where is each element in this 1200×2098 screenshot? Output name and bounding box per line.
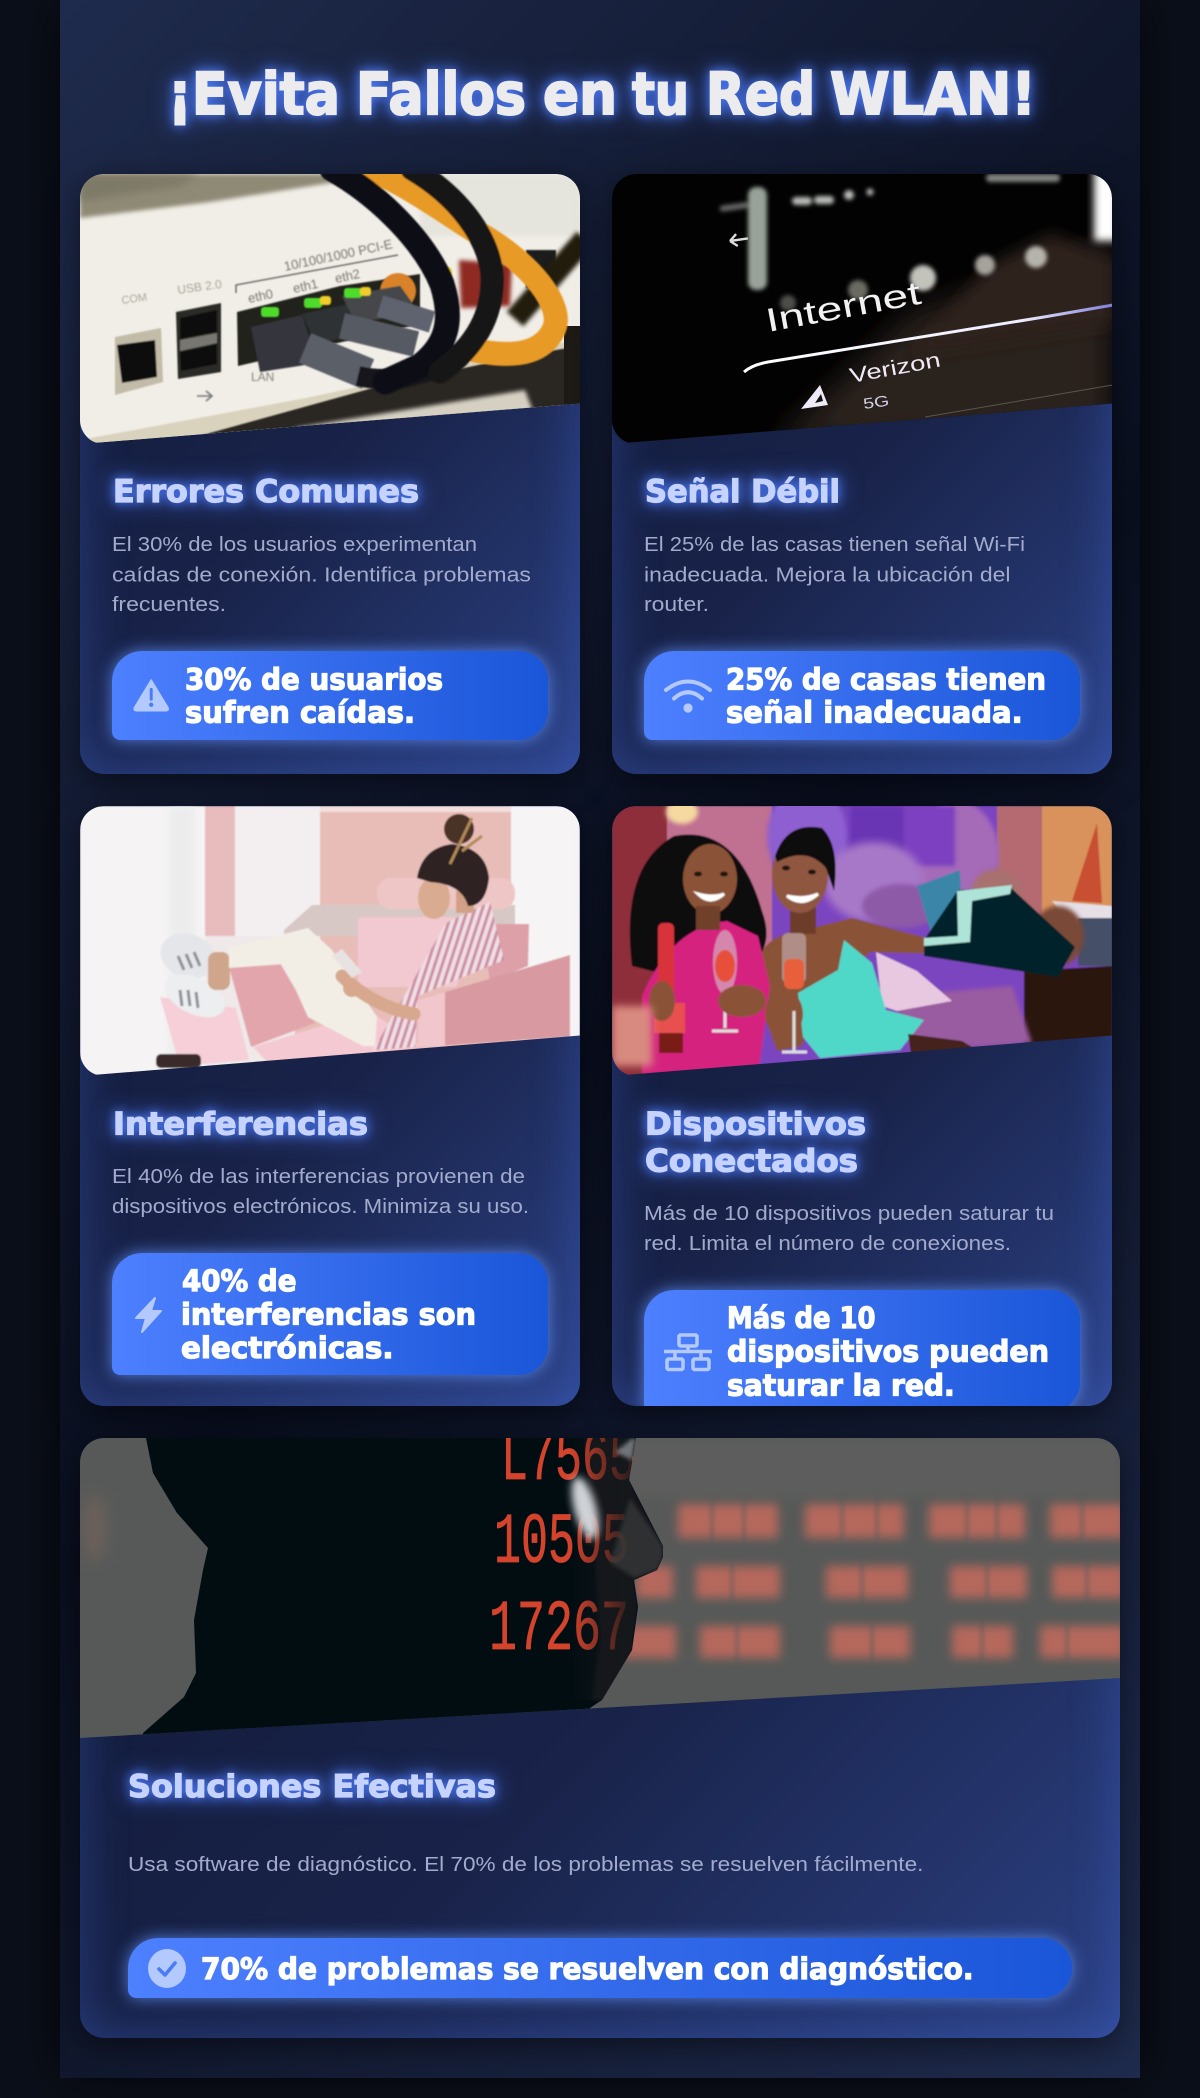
callout pill <box>128 1938 1072 1998</box>
title: ¡Evita <box>168 60 340 128</box>
pillows <box>824 842 924 922</box>
shirt <box>373 902 504 1050</box>
body text: Más de 10 dispositivos pueden saturar tu <box>644 1202 1054 1225</box>
body text <box>112 533 531 616</box>
callout pill <box>112 1253 548 1375</box>
silhouette <box>143 1438 663 1738</box>
woman right head <box>790 904 816 934</box>
callout text: dispositivos pueden <box>727 1335 1049 1369</box>
icon: network <box>664 1333 712 1372</box>
body text: inadecuada. Mejora la ubicación del <box>644 564 1010 586</box>
callout pill <box>644 651 1080 740</box>
photo: phone network screen: Verizon <box>848 349 942 388</box>
woman right body <box>761 917 926 1052</box>
body text <box>112 1165 529 1218</box>
heading: Interferencias <box>113 1106 368 1142</box>
photo: two women taking a selfie <box>612 806 1112 1075</box>
body text: Usa software de diagnóstico. El 70% de los problemas se resuelven fácilmente. <box>128 1853 923 1876</box>
body text: frecuentes. <box>112 593 226 616</box>
trousers <box>229 928 377 1046</box>
cables <box>332 169 556 382</box>
title: tu <box>632 60 689 128</box>
body text: red. Limita el número de conexiones. <box>644 1232 1011 1255</box>
panel: errores comunes <box>80 174 580 774</box>
woman left <box>630 835 766 976</box>
face and projected digits, clipped to the silhouette: 10505 <box>494 1504 629 1584</box>
panel: dispositivos conectados <box>612 806 1112 1406</box>
face and projected digits, clipped to the silhouette <box>489 1421 663 1700</box>
heading: Conectados <box>645 1144 858 1180</box>
body text: caídas de conexión. Identifica problemas <box>112 564 531 586</box>
heading: Señal Débil <box>645 474 840 510</box>
photo: router with cables <box>80 174 580 443</box>
title: Fallos <box>356 60 526 128</box>
ports <box>115 255 420 401</box>
heading: Soluciones Efectivas <box>128 1769 496 1805</box>
photo: phone network screen: 5G <box>862 393 890 413</box>
callout text: 25% de casas tienen <box>726 662 1046 696</box>
callout text: 70% de problemas se resuelven con diagnóstico. <box>200 1952 973 1986</box>
heading <box>632 1097 878 1188</box>
head <box>456 891 474 913</box>
icon: check circle <box>148 1949 186 1988</box>
title <box>159 55 1046 137</box>
printed labels: USB 2.0 <box>176 277 223 297</box>
photo: man silhouette with projected digits <box>80 1438 1120 1738</box>
arm and phone <box>342 976 414 1014</box>
printed labels: COM <box>121 292 148 307</box>
blurred digits <box>620 1504 1125 1658</box>
hat and table <box>1072 823 1102 903</box>
panel: señal débil <box>612 174 1112 774</box>
callout pill <box>644 1290 1080 1412</box>
icon: lightning bolt <box>135 1297 162 1333</box>
bottom-left blur <box>612 1006 652 1066</box>
photo: phone network screen <box>612 174 1112 443</box>
photo: woman on pink armchair <box>80 806 580 1075</box>
callout text <box>185 662 443 730</box>
camera <box>1032 906 1084 966</box>
callout text <box>726 662 1046 730</box>
body text: dispositivos electrónicos. Minimiza su uso. <box>112 1195 529 1218</box>
title: en <box>543 60 617 128</box>
printed labels <box>121 236 394 384</box>
callout text: electrónicas. <box>180 1331 393 1365</box>
callout text: interferencias son <box>180 1297 476 1331</box>
printed labels: LAN <box>251 370 274 384</box>
printed labels: eth2 <box>334 266 361 286</box>
printed labels: eth0 <box>247 286 274 306</box>
callout text: sufren caídas. <box>185 696 415 730</box>
callout text: saturar la red. <box>727 1369 955 1403</box>
panel: interferencias <box>80 806 580 1406</box>
callout text: 40% de <box>182 1264 296 1298</box>
body text <box>644 1202 1054 1255</box>
LEDs <box>261 267 452 317</box>
callout text <box>727 1299 1049 1403</box>
printed labels: eth1 <box>292 276 319 296</box>
body text: router. <box>644 593 709 616</box>
photo: phone network screen: Internet <box>763 274 924 339</box>
body text <box>644 533 1025 616</box>
orange cap and rear parts <box>380 273 416 309</box>
heading: Dispositivos <box>645 1106 866 1142</box>
plugs <box>251 286 446 379</box>
petals <box>764 806 848 874</box>
face and projected digits, clipped to the silhouette: 17267 <box>489 1591 629 1671</box>
callout text: 30% de usuarios <box>185 662 443 696</box>
callout text: Más de 10 <box>727 1301 876 1335</box>
body text: El 30% de los usuarios experimentan <box>112 533 477 556</box>
body text: El 25% de las casas tienen señal Wi-Fi <box>644 533 1025 556</box>
heading: Errores Comunes <box>113 474 419 510</box>
panel: soluciones efectivas <box>80 1438 1120 2038</box>
title: WLAN! <box>830 60 1036 128</box>
callout text: señal inadecuada. <box>726 696 1023 730</box>
callout text <box>180 1264 476 1365</box>
title: Red <box>706 60 815 128</box>
body text: El 40% de las interferencias provienen de <box>112 1165 525 1188</box>
icon: warning triangle <box>133 679 169 712</box>
sneakers <box>160 935 213 978</box>
callout pill <box>112 651 548 740</box>
icon: wifi <box>664 680 712 713</box>
printed labels: 10/100/1000 PCI-E <box>283 236 394 274</box>
